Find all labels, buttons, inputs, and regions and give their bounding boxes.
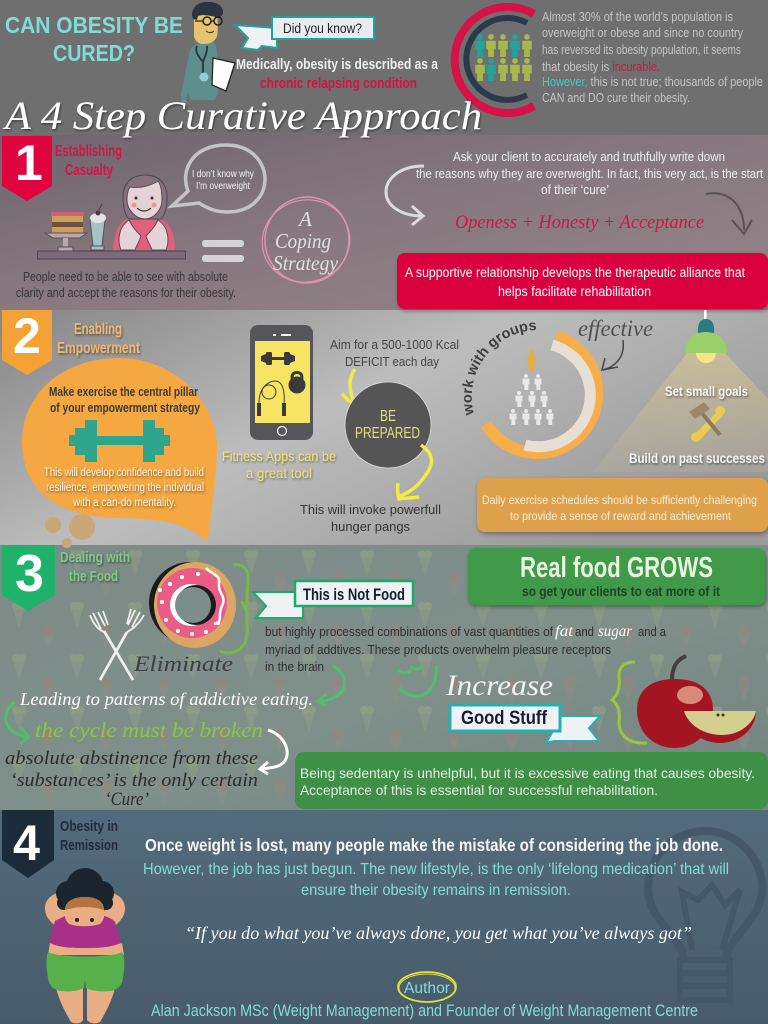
decorative circles bbox=[45, 514, 95, 548]
callout: being sedentary: Acceptance of this is essential for successful rehabilitation. bbox=[300, 782, 658, 798]
text: the cycle must be broken: the cycle must be broken bbox=[35, 718, 263, 742]
callout: real food grows: so get your clients to eat more of it bbox=[522, 584, 720, 599]
text: highly processed combinations: fat bbox=[555, 623, 574, 640]
text: eliminate: Eliminate bbox=[133, 651, 233, 676]
callout: exercise central pillar: Make exercise the central pillar bbox=[49, 384, 198, 399]
icon: lightbulb watermark bbox=[648, 831, 762, 1000]
icon: people pyramid bbox=[510, 349, 554, 425]
icon: doughnut bbox=[149, 562, 236, 648]
callout: a coping strategy bbox=[253, 190, 359, 292]
text: see with absolute clarity: People need to be able to see with absolute bbox=[23, 269, 228, 284]
arrow: deficit to be prepared bbox=[342, 369, 362, 408]
heading: establishing casualty bbox=[55, 143, 122, 179]
icon: woman with cake and milkshake at table bbox=[38, 175, 186, 259]
badge: number 2: 2 bbox=[13, 308, 41, 364]
text: increase: Increase bbox=[445, 669, 553, 702]
icon: woman stretching bbox=[45, 868, 125, 1023]
text: medically bbox=[236, 57, 439, 92]
title: can obesity be cured bbox=[5, 12, 183, 66]
heading: openess honesty acceptance: Openess + Honesty + Acceptance bbox=[455, 212, 704, 233]
callout: being sedentary bbox=[295, 752, 768, 809]
text: set small goals: Set small goals bbox=[665, 384, 748, 399]
text: highly processed combinations: but highly processed combinations of vast quantities of bbox=[265, 624, 553, 639]
text: ask your client: Ask your client to accurately and truthfully write down bbox=[453, 149, 725, 164]
label: work with groups: work with groups bbox=[462, 322, 536, 416]
circle: be prepared bbox=[345, 382, 431, 468]
title: can obesity be cured: CAN OBESITY BE bbox=[5, 12, 183, 38]
callout: this is not food: This is Not Food bbox=[303, 586, 405, 604]
arrow: brain to addictive eating bbox=[318, 665, 345, 706]
badge: number 1: 1 bbox=[15, 135, 43, 191]
callout: good stuff: Good Stuff bbox=[461, 708, 548, 729]
speech bubble: I’m overweight bbox=[196, 180, 250, 192]
callout: exercise central pillar: This will develop confidence and build bbox=[44, 467, 204, 479]
panel: step 4 bbox=[2, 810, 762, 1023]
text: highly processed combinations bbox=[265, 623, 667, 674]
heading: establishing casualty: Establishing bbox=[55, 143, 122, 160]
speech bubble: I don’t know why bbox=[192, 168, 255, 180]
text: job has just begun: However, the job has just begun. The new lifestyle, is the only ‘lifelong medication’ that will bbox=[143, 861, 729, 878]
text: medically: Medically, obesity is described as a bbox=[236, 57, 439, 73]
text: absolute abstinence: ‘substances’ is the only certain bbox=[10, 770, 258, 791]
text: hunger pangs bbox=[300, 502, 441, 534]
text: population facts: CAN and DO cure their obesity. bbox=[542, 91, 690, 105]
text: job has just begun: ensure their obesity remains in remission. bbox=[301, 882, 571, 899]
label: effective with arrow bbox=[578, 316, 653, 370]
callout: daily exercise schedules: to provide a sense of reward and achievement bbox=[510, 509, 732, 523]
text: fitness apps: a great tool bbox=[246, 465, 312, 481]
text: hunger pangs: This will invoke powerfull bbox=[300, 502, 441, 517]
text: see with absolute clarity bbox=[16, 269, 236, 300]
callout: real food grows: Real food GROWS bbox=[520, 552, 713, 584]
text: kcal deficit: Aim for a 500-1000 Kcal bbox=[330, 337, 459, 352]
text: ask your client bbox=[416, 149, 763, 197]
text: highly processed combinations: and a bbox=[638, 624, 667, 639]
callout: did you know: Did you know? bbox=[283, 20, 362, 36]
arrow: to supportive relationship bbox=[706, 193, 752, 234]
heading: obesity in remission: Obesity in bbox=[60, 819, 118, 835]
heading: dealing with the food: the Food bbox=[69, 568, 118, 585]
icon: phone with fitness gear bbox=[250, 325, 313, 440]
heading: obesity in remission bbox=[60, 819, 118, 854]
callout: good stuff bbox=[450, 705, 600, 743]
text: absolute abstinence bbox=[5, 748, 258, 810]
callout: exercise central pillar: resilience, empowering the individual bbox=[46, 482, 204, 494]
callout: exercise central pillar bbox=[22, 358, 217, 542]
icon: dumbbell bbox=[69, 420, 170, 462]
text: kcal deficit: DEFICIT each day bbox=[345, 354, 439, 369]
text: fitness apps bbox=[222, 448, 336, 481]
author credit: Alan Jackson MSc (Weight Management) and Founder of Weight Management Centre bbox=[151, 1002, 698, 1020]
text: highly processed combinations: sugar bbox=[598, 623, 633, 640]
arrow: addictive eating to cycle bbox=[6, 702, 29, 744]
badge: number 2 bbox=[2, 308, 52, 375]
speech bubble bbox=[172, 145, 265, 212]
text: job has just begun bbox=[143, 861, 729, 899]
text: hunger pangs: hunger pangs bbox=[331, 519, 410, 534]
badge: number 1 bbox=[2, 135, 52, 201]
text: population facts: overweight or obese and since no country bbox=[542, 26, 744, 40]
arrow: swoop to instructions bbox=[386, 166, 424, 225]
circle: be prepared: BE bbox=[380, 408, 396, 425]
icon: doctor bbox=[181, 2, 235, 104]
text: patterns of addictive eating: Leading to patterns of addictive eating. bbox=[19, 689, 313, 709]
icon: green brace bbox=[220, 565, 248, 653]
callout: a coping strategy: Coping bbox=[275, 229, 331, 253]
heading: enabling empowerment: Enabling bbox=[74, 321, 122, 338]
circle: be prepared: PREPARED bbox=[355, 425, 420, 442]
text: highly processed combinations: myriad of addtives. These products overwhelm pleasure receptors bbox=[265, 642, 611, 657]
text: population facts: that obesity is incurable. bbox=[542, 60, 660, 74]
text: absolute abstinence: ‘Cure’ bbox=[105, 789, 149, 810]
icon: lamp with light cone bbox=[593, 310, 768, 472]
panel: step 2 bbox=[2, 308, 768, 548]
icon: green smile arc bbox=[398, 666, 436, 696]
badge: number 4: 4 bbox=[13, 815, 40, 871]
author label: Author bbox=[404, 980, 451, 997]
callout: supportive relationship bbox=[397, 253, 768, 309]
badge: number 3: 3 bbox=[15, 545, 44, 603]
header panel bbox=[2, 2, 763, 138]
text: highly processed combinations: in the brain bbox=[265, 659, 324, 674]
arrow: cycle to abstinence bbox=[260, 730, 287, 774]
callout: exercise central pillar: with a can-do mentality. bbox=[72, 497, 176, 509]
callout: a coping strategy: Strategy bbox=[273, 251, 339, 275]
label: effective with arrow: effective bbox=[578, 316, 653, 341]
text: ask your client: of their ‘cure’ bbox=[541, 182, 609, 197]
heading: enabling empowerment bbox=[57, 321, 140, 357]
text: highly processed combinations: and bbox=[575, 624, 594, 639]
callout: this is not food bbox=[253, 581, 413, 618]
text: see with absolute clarity: clarity and accept the reasons for their obesity. bbox=[16, 285, 236, 300]
callout: a coping strategy: A bbox=[297, 207, 312, 231]
icon: hammer and wrench bbox=[689, 402, 725, 442]
author label bbox=[398, 972, 456, 1002]
chart: effective ring bbox=[486, 336, 597, 453]
text: fitness apps: Fitness Apps can be bbox=[222, 448, 336, 464]
icon: crossed forks bbox=[90, 609, 144, 680]
text: population facts bbox=[542, 10, 763, 105]
panel: step 3 bbox=[2, 545, 768, 810]
quote: “If you do what you’ve always done, you get what you’ve always got” bbox=[185, 923, 692, 943]
heading: obesity in remission: Remission bbox=[60, 838, 118, 854]
heading: dealing with the food bbox=[60, 549, 130, 585]
text: kcal deficit bbox=[330, 337, 459, 369]
text: population facts: Almost 30% of the world’s population is bbox=[542, 10, 733, 24]
callout: supportive relationship: helps facilitate rehabilitation bbox=[498, 284, 651, 299]
icon: equals sign bbox=[202, 240, 244, 262]
callout: did you know bbox=[235, 17, 374, 50]
icon: green brace by apple bbox=[612, 662, 647, 743]
heading: enabling empowerment: Empowerment bbox=[57, 340, 140, 357]
chart: population ring bbox=[455, 7, 534, 113]
badge: number 3 bbox=[2, 545, 55, 611]
heading: establishing casualty: Casualty bbox=[65, 162, 113, 179]
icon: apple and slice bbox=[637, 656, 756, 748]
text: medically: chronic relapsing condition bbox=[260, 76, 417, 92]
badge: number 4 bbox=[2, 810, 54, 878]
heading: a 4 step curative approach: A 4 Step Curative Approach bbox=[2, 93, 482, 138]
panel: step 1 bbox=[2, 135, 768, 309]
callout: real food grows bbox=[468, 548, 765, 605]
text: absolute abstinence: absolute abstinence from these bbox=[5, 748, 258, 769]
callout: being sedentary: Being sedentary is unhelpful, but it is excessive eating that causes obesity. bbox=[300, 765, 755, 781]
arrow: prepared to hunger bbox=[398, 445, 432, 499]
callout: exercise central pillar: of your empowerment strategy bbox=[50, 400, 201, 415]
callout: supportive relationship: A supportive relationship develops the therapeutic alliance that bbox=[405, 265, 745, 280]
callout: daily exercise schedules bbox=[477, 478, 768, 532]
title: can obesity be cured: CURED? bbox=[53, 40, 135, 66]
heading: dealing with the food: Dealing with bbox=[60, 549, 130, 566]
